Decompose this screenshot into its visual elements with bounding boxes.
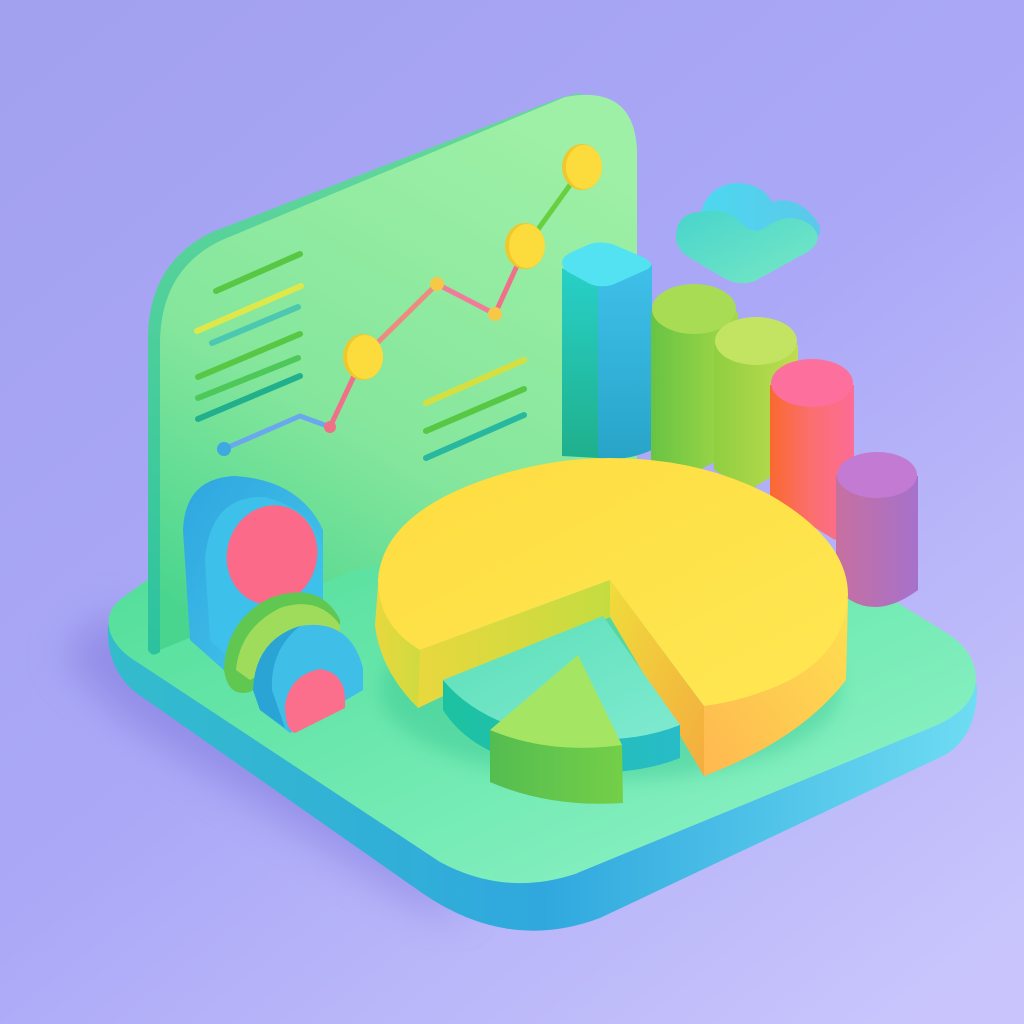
pie outer left side	[375, 585, 440, 708]
large arch icon	[183, 476, 328, 680]
board front	[160, 95, 637, 650]
bar 1 top	[562, 242, 651, 286]
text lines right	[426, 360, 524, 458]
pie top	[378, 458, 848, 706]
wedge side	[490, 730, 623, 804]
bar 2	[651, 284, 738, 480]
cloud back lobes	[700, 183, 820, 241]
teal slice	[443, 616, 680, 772]
bar 5 top	[837, 452, 917, 498]
pie shadow	[380, 600, 840, 780]
pie chart	[375, 458, 848, 776]
bar 2 top	[652, 284, 736, 334]
board edge	[148, 93, 590, 655]
board	[148, 93, 637, 655]
arch front	[205, 497, 323, 670]
platform shadow	[62, 610, 470, 915]
green arch icon	[224, 592, 340, 693]
pie outer right side	[704, 600, 848, 776]
bar 1	[562, 242, 652, 459]
teal slice side	[443, 680, 680, 772]
bar 3	[714, 317, 798, 490]
chart points	[217, 144, 602, 456]
small arch icon	[253, 625, 363, 733]
platform top surface	[108, 480, 976, 883]
bar 1 right face	[598, 265, 652, 459]
small arch shade	[253, 626, 300, 728]
bar 3 top	[715, 317, 797, 365]
green arch highlight	[236, 604, 340, 680]
cloud face	[676, 210, 818, 283]
bar 4 top	[771, 359, 853, 407]
green wedge	[490, 655, 623, 804]
text lines left	[197, 254, 301, 419]
wedge top	[490, 655, 622, 748]
platform side	[108, 625, 977, 931]
small arch pink	[285, 669, 345, 733]
cloud	[676, 183, 820, 283]
bar 1 left face	[562, 268, 598, 458]
platform base	[108, 480, 977, 931]
teal slice top	[443, 616, 680, 740]
line chart	[217, 144, 602, 456]
pink circle	[216, 495, 328, 615]
bar 4	[770, 359, 854, 540]
pie inner right face	[610, 580, 704, 776]
bar 5	[836, 452, 918, 607]
pie inner left face	[418, 580, 610, 708]
